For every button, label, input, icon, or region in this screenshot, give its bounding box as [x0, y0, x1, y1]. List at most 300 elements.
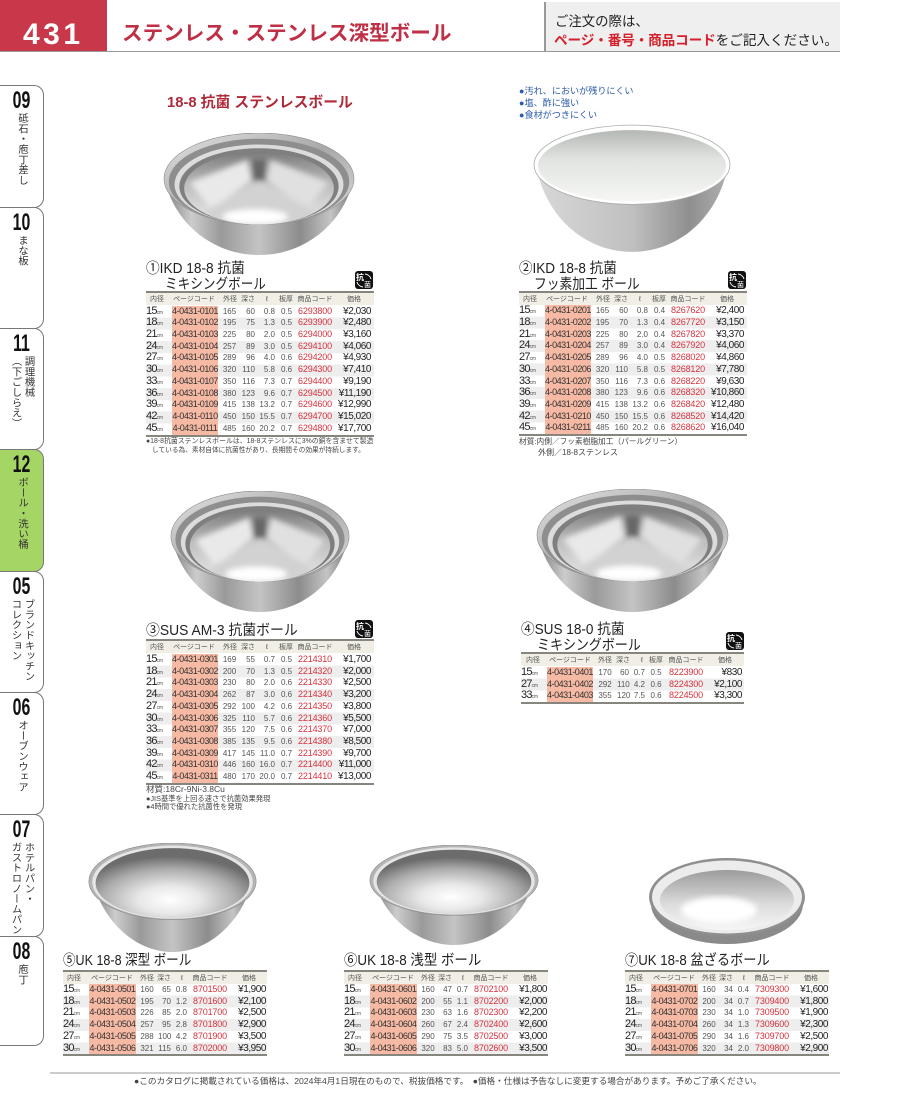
- table rows: ¥4,060: [716, 340, 744, 351]
- table rows: 34: [724, 1044, 733, 1053]
- table rows: 2214310: [298, 654, 332, 664]
- table rows: ¥3,200: [343, 689, 371, 700]
- table rows: 4-0431-0308: [172, 736, 218, 746]
- side tab: 12 active: ボール・洗い桶: [16, 477, 27, 549]
- table rows: 1.1: [457, 997, 468, 1006]
- table rows: 0.7: [281, 749, 292, 758]
- table rows: [519, 305, 747, 436]
- table rows: 0.7: [634, 668, 645, 677]
- table rows: 70: [619, 318, 628, 327]
- table rows: 4.2: [634, 680, 645, 689]
- table rows: 83: [443, 1044, 452, 1053]
- table header: 外径: [421, 975, 435, 982]
- table rows: 8701800: [193, 1019, 227, 1029]
- table rows: 1.6: [738, 1032, 749, 1041]
- table rows: 4-0431-0605: [370, 1031, 416, 1041]
- table rows: 2.0: [637, 330, 648, 339]
- table rows: 18cm: [625, 995, 642, 1007]
- product 1 name: ①IKD 18-8 抗菌: [146, 261, 245, 277]
- table rows: 20.2: [259, 424, 275, 433]
- table rows: 95: [162, 1020, 171, 1029]
- table rows: [625, 984, 829, 1056]
- panel: product 2 IKD coated bowl: [519, 260, 747, 457]
- table rows: 15cm: [344, 983, 361, 995]
- table rows: 110: [615, 365, 628, 374]
- side tab: 11: 11: [13, 330, 30, 357]
- table header: 商品コード: [192, 975, 228, 982]
- table rows: 89: [619, 341, 628, 350]
- table rows: 20.2: [632, 423, 648, 432]
- table rows: 0.5: [654, 353, 665, 362]
- table rows: 8267920: [671, 340, 705, 350]
- table rows: ¥12,990: [338, 399, 371, 410]
- table rows: 4-0431-0401: [547, 667, 593, 677]
- product 2 name: [519, 260, 640, 293]
- side tab: 09: 砥石・庖丁差し: [16, 113, 27, 185]
- side tab: 06: [0, 692, 44, 815]
- table header: ページコード: [546, 296, 588, 303]
- table rows: 4-0431-0109: [172, 399, 218, 409]
- table rows: 120: [242, 725, 255, 734]
- table rows: 15cm: [146, 653, 163, 665]
- side tab: 06: オーブンウェア: [16, 720, 27, 792]
- table rows: 9.6: [637, 388, 648, 397]
- table header: [146, 639, 374, 653]
- table rows: 1.6: [457, 1008, 468, 1017]
- table rows: 4-0431-0701: [652, 984, 697, 994]
- table rows: 0.7: [281, 400, 292, 409]
- feature list: ●食材がつきにくい: [519, 110, 597, 120]
- table rows: 27cm: [63, 1030, 80, 1042]
- side tab: 07: 07: [13, 816, 30, 843]
- table rows: 2214410: [298, 771, 332, 781]
- table rows: 4-0431-0104: [172, 341, 218, 351]
- table rows: 15.5: [259, 412, 275, 421]
- table rows: ¥3,300: [714, 690, 742, 701]
- table rows: 350: [596, 376, 609, 386]
- table rows: 4-0431-0304: [172, 689, 218, 699]
- table rows: 75: [246, 318, 255, 327]
- panel: product 4 SUS 18-0 mixing bowl: [521, 621, 744, 704]
- side tab: 09: [0, 85, 44, 208]
- side tab: 08: 庖丁: [16, 964, 27, 985]
- table rows: 2.0: [264, 330, 275, 339]
- table rows: 100: [242, 702, 255, 711]
- table header: [146, 291, 374, 305]
- table rows: 3.0: [264, 690, 275, 699]
- table rows: 0.7: [457, 985, 468, 994]
- feature list: ●汚れ、においが残りにくい: [519, 86, 634, 96]
- table rows: ¥9,630: [716, 376, 744, 386]
- table header: [519, 291, 747, 305]
- table rows: 8268120: [671, 364, 705, 374]
- table rows: 289: [223, 353, 236, 362]
- table rows: ¥2,100: [238, 996, 266, 1007]
- table rows: 0.7: [281, 424, 292, 433]
- table rows: 6294000: [298, 329, 332, 339]
- table rows: 8268020: [671, 352, 705, 362]
- table rows: 320: [421, 1044, 435, 1053]
- table rows: ¥12,480: [711, 399, 744, 410]
- table rows: 0.5: [281, 307, 292, 316]
- table rows: 165: [223, 307, 236, 316]
- order notice box: [544, 2, 840, 52]
- table header: 深さ: [241, 296, 255, 303]
- table rows: 4-0431-0703: [652, 1007, 697, 1017]
- table rows: 485: [223, 424, 236, 433]
- table rows: 4.0: [264, 353, 275, 362]
- table rows: 0.6: [654, 376, 665, 386]
- table rows: 195: [596, 318, 609, 327]
- photo: bowl 6 shallow bowl: [370, 845, 538, 945]
- table rows: 34: [724, 997, 733, 1006]
- table rows: 34: [724, 1008, 733, 1017]
- table rows: 4-0431-0105: [172, 352, 218, 362]
- table rows: 446: [223, 760, 236, 769]
- table rows: 2.0: [738, 1044, 749, 1053]
- table rows: 195: [223, 318, 236, 327]
- table rows: 30cm: [146, 712, 163, 724]
- table rows: 2214340: [298, 689, 332, 699]
- table rows: 42cm: [146, 758, 163, 770]
- table header: 板厚: [279, 296, 293, 303]
- icon: antibacterial badge: [355, 620, 373, 638]
- table rows: 30cm: [146, 363, 163, 375]
- table rows: 6294500: [298, 388, 332, 398]
- table rows: ¥1,900: [800, 1007, 828, 1018]
- table rows: 4-0431-0103: [172, 329, 218, 339]
- panel: product 6 UK shallow bowl: [344, 952, 548, 1056]
- table header: ℓ: [743, 975, 745, 982]
- table rows: 0.7: [281, 377, 292, 386]
- table rows: 0.6: [654, 400, 665, 409]
- table rows: 8268620: [671, 422, 705, 432]
- footer note: ●このカタログに掲載されている価格は、2024年4月1日現在のもので、税抜価格です。 ●価格・仕様は予告なしに変更する場合があります。予めご了承ください。: [134, 1076, 762, 1086]
- table rows: 24cm: [146, 340, 163, 352]
- side tab: 10: まな板: [16, 235, 27, 266]
- icon: antibacterial badge: 菌: [364, 629, 371, 638]
- table rows: 0.8: [176, 985, 187, 994]
- table rows: 60: [246, 307, 255, 316]
- product 7 name: ⑦UK 18-8 盆ざるボール: [625, 953, 770, 969]
- table rows: 55: [443, 997, 452, 1006]
- table header: 価格: [523, 975, 537, 982]
- table rows: ¥11,000: [339, 759, 371, 770]
- table rows: 6.0: [176, 1044, 187, 1053]
- table rows: 4-0431-0403: [547, 690, 593, 700]
- table rows: 355: [598, 691, 612, 700]
- table header: ℓ: [181, 975, 183, 982]
- table header: 内径: [526, 657, 540, 664]
- table rows: 450: [596, 412, 609, 421]
- table rows: 4-0431-0506: [90, 1043, 135, 1053]
- table rows: 13.2: [632, 400, 648, 409]
- table rows: 5.8: [264, 365, 275, 374]
- table rows: 6294100: [298, 341, 332, 351]
- table rows: 21cm: [625, 1006, 642, 1018]
- table rows: 24cm: [63, 1018, 80, 1030]
- table rows: 45cm: [519, 421, 536, 433]
- section heading: 18-8 抗菌 ステンレスボール: [167, 95, 353, 111]
- table header: 深さ: [719, 975, 733, 982]
- panel: product 3 SUS AM-3 bowl: [146, 620, 374, 811]
- table rows: ¥11,190: [339, 388, 371, 399]
- table rows: 24cm: [519, 339, 536, 351]
- table rows: 0.5: [650, 668, 662, 677]
- table rows: ¥2,200: [519, 1007, 547, 1018]
- table rows: 0.7: [281, 772, 292, 781]
- table rows: 6294400: [298, 376, 332, 386]
- table header: [344, 970, 548, 984]
- table rows: [146, 654, 374, 785]
- table rows: ¥8,500: [343, 736, 371, 747]
- table rows: 85: [162, 1008, 171, 1017]
- table rows: 0.7: [281, 412, 292, 421]
- table rows: 289: [596, 353, 609, 362]
- table rows: 257: [140, 1020, 154, 1029]
- table rows: 123: [615, 388, 628, 397]
- table header: 外径: [598, 657, 612, 664]
- table rows: 11.0: [260, 749, 275, 758]
- table rows: ¥9,700: [343, 748, 371, 759]
- table rows: ¥2,100: [714, 679, 742, 690]
- table rows: 18cm: [344, 995, 361, 1007]
- table rows: ¥2,480: [343, 317, 371, 328]
- table rows: 3.5: [457, 1032, 468, 1041]
- table rows: 115: [158, 1044, 171, 1053]
- side tab: 05: [0, 571, 44, 693]
- table rows: 6294600: [298, 399, 332, 409]
- table rows: 0.6: [650, 680, 662, 689]
- table rows: 7309500: [755, 1007, 789, 1017]
- table rows: 150: [242, 412, 255, 421]
- table rows: 0.4: [654, 306, 665, 315]
- table rows: 2.4: [457, 1020, 468, 1029]
- table rows: 116: [615, 376, 628, 386]
- photo: bowl 4 nested bowls: [536, 489, 728, 612]
- product 5 name: ⑤UK 18-8 深型 ボール: [63, 953, 191, 969]
- table rows: 30cm: [519, 363, 536, 375]
- table rows: 8702300: [474, 1007, 508, 1017]
- table rows: 4-0431-0203: [545, 329, 591, 339]
- table rows: 47: [443, 985, 452, 994]
- icon: antibacterial badge: 菌: [737, 280, 744, 289]
- table rows: 42cm: [519, 410, 536, 422]
- header: page number block: 431: [23, 18, 84, 51]
- table rows: 4-0431-0305: [172, 701, 218, 711]
- table rows: 135: [242, 737, 255, 746]
- table rows: 4-0431-0307: [172, 724, 218, 734]
- table rows: 480: [223, 772, 236, 781]
- table rows: 321: [140, 1044, 154, 1053]
- table rows: 4-0431-0207: [545, 376, 591, 386]
- side tab: 06: 06: [13, 694, 30, 721]
- table header: 板厚: [279, 644, 293, 651]
- table rows: 89: [246, 342, 255, 351]
- table header: ℓ: [639, 296, 641, 303]
- table rows: 6293900: [298, 317, 332, 327]
- table rows: ¥4,930: [343, 352, 371, 363]
- table rows: 13.2: [259, 400, 275, 409]
- table rows: 33cm: [521, 689, 538, 701]
- table rows: 8268320: [671, 387, 705, 397]
- product 1 name: [146, 260, 266, 293]
- table rows: 55: [246, 655, 255, 664]
- table rows: 7309800: [755, 1043, 789, 1053]
- table rows: 257: [223, 342, 236, 351]
- table rows: 27cm: [146, 351, 163, 363]
- table rows: 225: [596, 330, 609, 339]
- icon: antibacterial badge: 抗: [356, 621, 364, 631]
- table header: 外径: [596, 296, 610, 303]
- table rows: 0.7: [281, 389, 292, 398]
- photo: bowl 2 coated bowl: [534, 124, 730, 252]
- table rows: ¥3,500: [238, 1031, 266, 1042]
- side tab: 10: 10: [13, 209, 30, 236]
- table rows: 0.6: [281, 702, 292, 711]
- table header: ページコード: [173, 644, 215, 651]
- table rows: 36cm: [519, 386, 536, 398]
- table rows: 6294700: [298, 411, 332, 421]
- table header: ℓ: [266, 644, 268, 651]
- table rows: 2214320: [298, 666, 332, 676]
- icon: antibacterial badge: [726, 632, 744, 650]
- side tab: 09: 09: [13, 87, 30, 114]
- table rows: 7309400: [755, 996, 789, 1006]
- table rows: 15cm: [146, 305, 163, 317]
- table rows: 30cm: [63, 1042, 80, 1054]
- table rows: 4-0431-0310: [172, 759, 218, 769]
- side tab: 07: [0, 814, 44, 937]
- table header: [625, 970, 829, 984]
- order notice box: ご注文の際は、: [555, 14, 649, 29]
- table rows: 120: [617, 691, 630, 700]
- table rows: 96: [246, 353, 255, 362]
- table rows: 0.5: [281, 667, 292, 676]
- table rows: ¥4,060: [343, 341, 371, 352]
- table rows: 292: [598, 680, 612, 689]
- table rows: 0.6: [281, 725, 292, 734]
- table rows: 4-0431-0601: [370, 984, 416, 994]
- table rows: 4-0431-0208: [545, 387, 591, 397]
- side tab: 07: ホテルパン・: [22, 842, 34, 904]
- table rows: 450: [223, 412, 236, 421]
- table rows: ¥2,600: [519, 1019, 547, 1030]
- side tab: 05: コレクション: [10, 599, 20, 661]
- table rows: 5.8: [637, 365, 648, 374]
- table rows: 15cm: [519, 304, 536, 316]
- table rows: 6293800: [298, 306, 332, 316]
- table rows: 4-0431-0111: [173, 423, 217, 433]
- table rows: 9.6: [264, 389, 275, 398]
- table rows: 4-0431-0202: [545, 317, 591, 327]
- table rows: 34: [724, 985, 733, 994]
- table header: ページコード: [549, 657, 591, 664]
- table rows: ¥2,500: [343, 677, 371, 688]
- table rows: 385: [223, 737, 236, 746]
- product 1 note: している為、素材自体に抗菌性があり、長期間その効果が持続します。: [152, 447, 365, 454]
- product 3 notes: ●JIS基準を上回る速さで抗菌効果発現: [146, 794, 270, 803]
- table rows: 8224500: [669, 690, 703, 700]
- table header: ページコード: [653, 975, 695, 982]
- side tab: 12 active: [0, 449, 44, 572]
- table rows: 4-0431-0108: [172, 388, 218, 398]
- table rows: 355: [223, 725, 236, 734]
- table rows: 415: [596, 400, 609, 409]
- table rows: 116: [242, 377, 255, 386]
- table rows: 0.5: [281, 655, 292, 664]
- table rows: 160: [242, 760, 255, 769]
- table rows: 2214350: [298, 701, 332, 711]
- table rows: 320: [596, 365, 609, 374]
- table header: ℓ: [266, 296, 268, 303]
- icon: antibacterial badge: 菌: [735, 641, 742, 650]
- table rows: ¥2,400: [716, 305, 744, 316]
- table rows: 0.6: [281, 690, 292, 699]
- table rows: 380: [223, 389, 236, 398]
- table header: ページコード: [91, 975, 133, 982]
- table rows: 8702200: [474, 996, 508, 1006]
- feature list: [519, 86, 634, 120]
- table rows: 8267820: [671, 329, 705, 339]
- table rows: 3.0: [264, 342, 275, 351]
- photo: bowl 7 tray bowl: [649, 858, 805, 944]
- table rows: ¥3,160: [343, 329, 371, 340]
- product 4 name: ④SUS 18-0 抗菌: [521, 622, 624, 638]
- table rows: 1.3: [264, 318, 275, 327]
- side tab: 11: （下ごしらえ）: [10, 356, 20, 428]
- table rows: 417: [223, 749, 236, 758]
- table rows: 4-0431-0606: [370, 1043, 416, 1053]
- table rows: 21cm: [146, 328, 163, 340]
- table rows: 33cm: [146, 723, 163, 735]
- table header: 価格: [718, 657, 732, 664]
- table rows: ¥7,000: [343, 724, 371, 735]
- table header: ページコード: [372, 975, 414, 982]
- side tab: 05: 05: [13, 573, 30, 600]
- table rows: 2214380: [298, 736, 332, 746]
- table rows: 80: [619, 330, 628, 339]
- table rows: 226: [140, 1008, 154, 1017]
- table rows: 4-0431-0201: [545, 305, 591, 315]
- table rows: 4-0431-0303: [172, 677, 218, 687]
- table rows: 33cm: [519, 374, 536, 386]
- table rows: 230: [702, 1008, 716, 1017]
- table header: 外径: [223, 644, 237, 651]
- table rows: 7309300: [755, 984, 789, 994]
- table rows: 0.6: [654, 412, 665, 421]
- table rows: 27cm: [625, 1030, 642, 1042]
- table rows: 18cm: [146, 316, 163, 328]
- table rows: 160: [702, 985, 716, 994]
- table rows: 4-0431-0604: [370, 1019, 416, 1029]
- table rows: [344, 984, 548, 1056]
- table rows: 27cm: [146, 700, 163, 712]
- table rows: 170: [598, 668, 612, 677]
- table rows: ¥2,000: [519, 996, 547, 1007]
- table rows: 257: [596, 341, 609, 350]
- table header: 外径: [140, 975, 154, 982]
- table rows: 4-0431-0402: [547, 679, 593, 689]
- table rows: [63, 984, 267, 1056]
- table rows: 200: [421, 997, 435, 1006]
- photo: bowl 5 deep bowl: [88, 843, 256, 952]
- table rows: 8268520: [671, 411, 705, 421]
- table rows: 27cm: [519, 351, 536, 363]
- table rows: ¥3,150: [716, 317, 744, 328]
- table rows: 2214330: [298, 677, 332, 687]
- side tab: 07: ガストロノームパン: [10, 842, 20, 935]
